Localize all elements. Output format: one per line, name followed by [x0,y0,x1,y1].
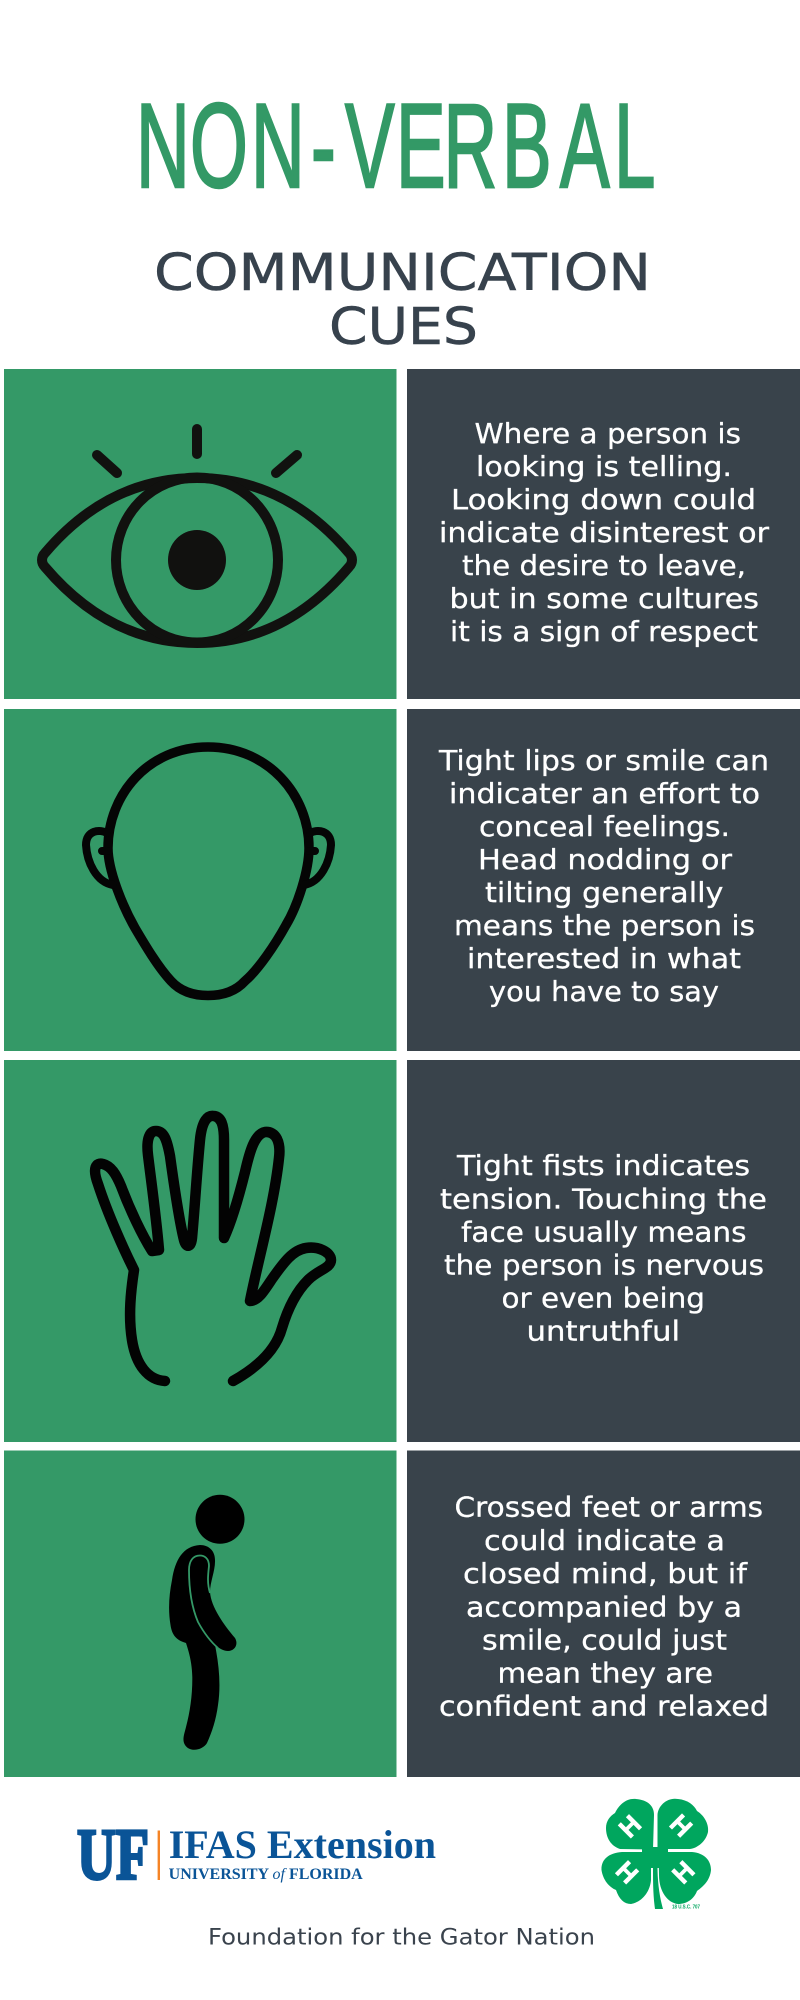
panel: hand text: Tight fists indicates [456,1150,750,1182]
icon: hand [95,1116,331,1381]
panel: hand text: tension. Touching the [440,1184,767,1216]
panel: posture text: mean they are [498,1658,713,1690]
panel: posture text: accompanied by a [466,1592,742,1624]
panel: eye text: but in some cultures [450,583,759,615]
panel: eye text: it is a sign of respect [450,616,758,648]
panel: head text: you have to say [489,976,719,1008]
panel: eye text: indicate disinterest or [439,517,770,549]
panel: eye text [407,369,800,699]
subtitle: COMMUNICATION [154,243,651,302]
icon: head [86,747,331,996]
logo: 4-H clover: 18 U.S.C. 707 [672,1905,700,1911]
footer tagline: Foundation for the Gator Nation [208,1924,595,1950]
logo: 4-H clover: H [664,1808,698,1843]
panel: head text: indicater an effort to [449,778,760,810]
title: NON-VERBAL [136,80,655,213]
panel: posture text: confident and relaxed [439,1690,769,1722]
panel: eye text: the desire to leave, [462,550,746,582]
panel: posture text [407,1450,800,1777]
panel: eye [4,369,396,699]
logo: UF IFAS Extension [77,1814,436,1895]
logo: 4-H clover: H [610,1855,644,1889]
panel: eye text: Where a person is [474,418,741,450]
panel: eye text: looking is telling. [476,451,732,483]
panel: hand text [407,1060,800,1442]
panel: head text: means the person is [454,910,755,942]
panel: posture text: closed mind, but if [463,1558,748,1590]
panel: hand text: the person is nervous [444,1250,764,1282]
logo: UF IFAS Extension: UF [77,1814,149,1895]
panel: posture text: Crossed feet or arms [454,1492,763,1524]
panel: hand text: or even being [502,1282,705,1314]
subtitle [154,243,651,356]
panel: head text: conceal feelings. [479,811,730,843]
panel: posture [4,1450,396,1777]
panel: hand text: untruthful [526,1316,680,1348]
logo: 4-H clover: H [613,1809,647,1843]
logo: 4-H clover: H [666,1855,700,1889]
panel: head [4,709,396,1051]
panel: posture text: could indicate a [484,1525,725,1557]
panel: head text [407,709,800,1051]
panel: head text: tilting generally [485,877,724,909]
panel: hand text: face usually means [461,1216,746,1248]
subtitle: CUES [329,297,478,356]
panel: eye text: Looking down could [451,484,756,516]
icon: eye [42,429,352,643]
panel: hand [4,1060,396,1442]
panel: head text: Tight lips or smile can [438,745,769,777]
logo: UF IFAS Extension: IFAS Extension [169,1822,436,1867]
logo: UF IFAS Extension: UNIVERSITY of FLORIDA [169,1866,364,1883]
icon: standing person [169,1495,244,1750]
panel: posture text: smile, could just [482,1624,727,1656]
panel: head text: Head nodding or [478,844,733,876]
logo: 4-H clover [601,1799,711,1911]
panel: head text: interested in what [467,943,741,975]
